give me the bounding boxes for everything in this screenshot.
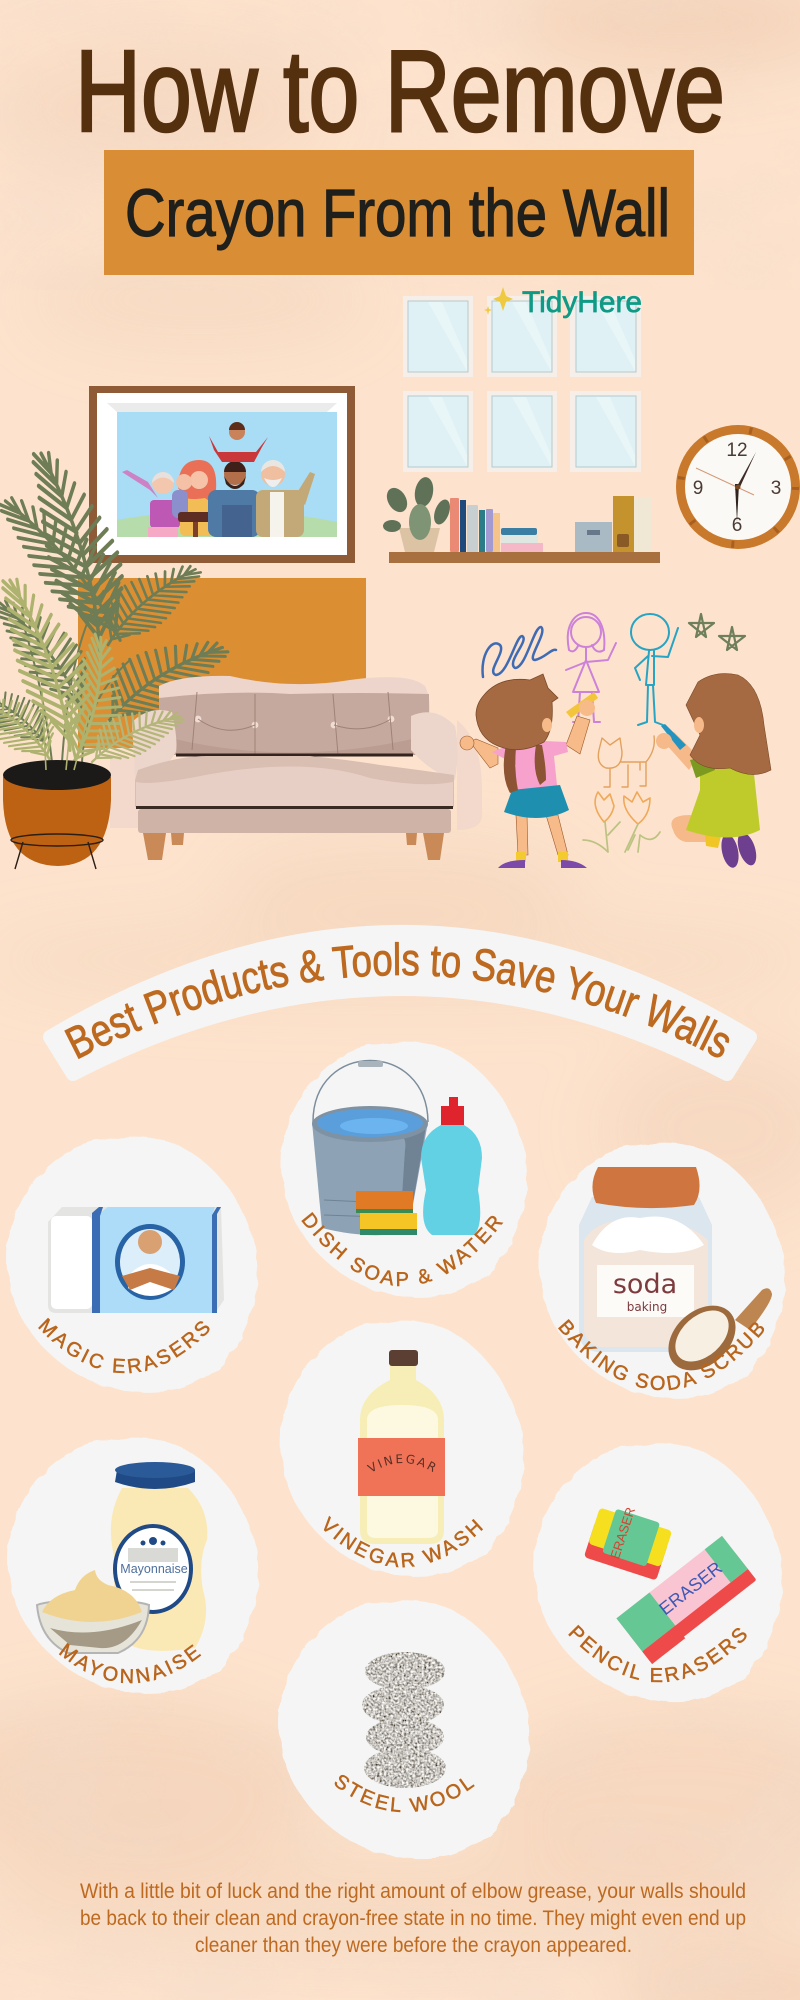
palm plant fronds <box>0 449 229 780</box>
icon: small eraser <box>584 1499 675 1580</box>
panel: mayonnaise <box>7 1438 260 1694</box>
panel: steel wool: STEEL WOOL <box>334 1774 475 1812</box>
icon: large eraser <box>616 1536 758 1664</box>
right girl drawing <box>656 674 771 869</box>
panel: pencil erasers <box>533 1443 783 1702</box>
icon: mayonnaise jar and bowl: Mayonnaise <box>120 1562 188 1576</box>
panel: vinegar wash: VINEGAR WASH <box>324 1516 483 1568</box>
icon: small eraser: ERASER <box>607 1505 638 1561</box>
section banner heading: Best Products & Tools to Save Your Walls <box>64 942 730 1060</box>
grandfather <box>256 460 315 537</box>
icon: soda jar and scoop: baking <box>627 1300 667 1314</box>
icon: vinegar bottle: VINEGAR <box>366 1454 436 1472</box>
left girl drawing <box>460 674 598 868</box>
panel: magic erasers <box>6 1136 258 1393</box>
blue crayon <box>661 724 686 750</box>
panel: magic erasers: MAGIC ERASERS <box>38 1318 210 1374</box>
crayon wall drawings <box>483 613 745 852</box>
panel: vinegar wash <box>280 1320 524 1577</box>
wall clock: 9 <box>693 478 703 499</box>
icon: large eraser: ERASER <box>655 1558 726 1619</box>
icon: steel wool pads <box>362 1652 446 1788</box>
panel: dish soap and water <box>280 1042 528 1298</box>
panel: dish soap and water: DISH SOAP & WATER <box>301 1212 504 1286</box>
logo: TidyHere: TidyHere <box>522 286 642 319</box>
icon: magic eraser box <box>48 1207 224 1313</box>
closing text: cleaner than they were before the crayon appeared. <box>195 1934 632 1957</box>
subtitle text: Crayon From the Wall <box>125 176 670 251</box>
closing text: With a little bit of luck and the right amount of elbow grease, your walls should <box>80 1880 746 1903</box>
shelf <box>389 552 660 563</box>
plant pot <box>3 690 111 869</box>
blue stick boy <box>631 614 678 725</box>
books on shelf <box>450 496 652 552</box>
icon: soda jar and scoop <box>579 1167 772 1383</box>
wall clock: 12 <box>726 440 748 461</box>
sofa <box>110 676 482 860</box>
stars <box>689 614 745 650</box>
icon: vinegar bottle <box>358 1350 445 1544</box>
icon: bucket, sponges and soap bottle <box>312 1060 482 1235</box>
icon: sparkle stars <box>484 287 513 315</box>
grandmother <box>122 470 180 537</box>
panel: baking soda scrub <box>538 1142 786 1399</box>
wall clock: 6 <box>732 515 742 536</box>
light palm frond over sofa <box>79 682 184 787</box>
flowers <box>595 792 650 824</box>
closing text: be back to their clean and crayon-free state in no time. They might even end up <box>80 1907 746 1930</box>
yellow crayon <box>566 692 598 718</box>
cat <box>598 736 654 787</box>
family picture frame <box>89 386 355 563</box>
mother and child <box>172 460 216 537</box>
wall clock: 3 <box>771 478 781 499</box>
subtitle banner <box>104 150 694 275</box>
icon: mayonnaise jar and bowl <box>37 1462 207 1653</box>
potted plant on shelf <box>383 476 453 552</box>
icon: soda jar and scoop: soda <box>613 1269 677 1300</box>
wall windows <box>403 296 641 472</box>
panel: pencil erasers: PENCIL ERASERS <box>568 1624 747 1682</box>
pink stick girl <box>566 613 616 722</box>
orange wall panel <box>78 578 366 748</box>
panel: mayonnaise: MAYONNAISE <box>58 1642 202 1684</box>
panel: steel wool <box>278 1600 530 1860</box>
father with child on shoulders <box>208 422 268 537</box>
wall clock <box>676 425 800 549</box>
closing text <box>80 1880 746 1957</box>
blue scribble <box>483 627 556 677</box>
panel: baking soda scrub: BAKING SODA SCRUB <box>558 1319 764 1390</box>
